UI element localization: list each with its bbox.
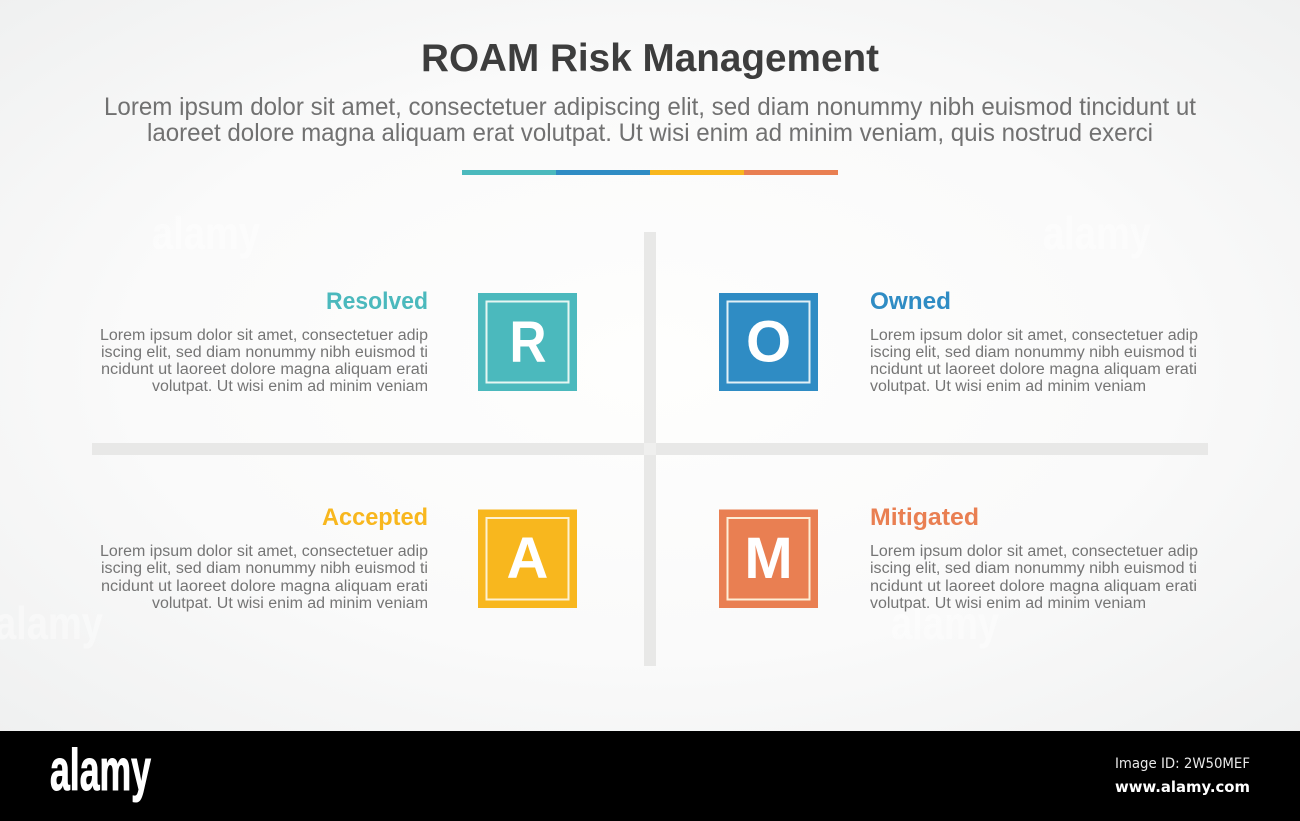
text block: accepted: Lorem ipsum dolor sit amet, consectetuer adip (100, 543, 428, 560)
text block: resolved: iscing elit, sed diam nonummy nibh euismod ti (101, 344, 428, 361)
text block: resolved: Lorem ipsum dolor sit amet, consectetuer adip (100, 327, 428, 344)
text block: accepted (100, 543, 428, 612)
text block: owned: Lorem ipsum dolor sit amet, consectetuer adip (870, 327, 1198, 344)
watermarks: alamy (891, 597, 999, 649)
footer logo: alamy (50, 738, 151, 803)
text block: owned: iscing elit, sed diam nonummy nibh euismod ti (870, 344, 1197, 361)
icon: R square (478, 293, 577, 391)
text block: mitigated: Lorem ipsum dolor sit amet, consectetuer adip (870, 543, 1198, 560)
icon: A square: A (507, 526, 548, 591)
icon: R square: R (510, 310, 546, 375)
text block: owned: volutpat. Ut wisi enim ad minim veniam (870, 378, 1146, 395)
quadrant axes (92, 232, 1208, 666)
icon: M square: M (744, 526, 793, 591)
text block: mitigated: volutpat. Ut wisi enim ad minim veniam (870, 595, 1146, 612)
icon: A square (478, 510, 577, 608)
watermarks: alamy (152, 207, 260, 259)
subtitle (104, 93, 1196, 147)
text block: resolved (100, 327, 428, 395)
text block: mitigated (870, 543, 1198, 612)
footer bar (0, 731, 1300, 821)
icon: M square (719, 510, 818, 608)
heading: owned: Owned (870, 288, 951, 315)
panel: resolved (100, 288, 577, 395)
heading: mitigated: Mitigated (870, 504, 979, 531)
subtitle: laoreet dolore magna aliquam erat volutpat. Ut wisi enim ad minim veniam, quis nostrud exerci (147, 119, 1153, 147)
text block: owned: ncidunt ut laoreet dolore magna aliquam erati (870, 361, 1197, 378)
heading: resolved: Resolved (326, 288, 428, 315)
title: ROAM Risk Management (421, 37, 879, 80)
panel: accepted (100, 504, 577, 612)
subtitle: Lorem ipsum dolor sit amet, consectetuer adipiscing elit, sed diam nonummy nibh euismod tincidunt ut (104, 93, 1196, 121)
text block: mitigated: iscing elit, sed diam nonummy nibh euismod ti (870, 560, 1197, 577)
text block: resolved: volutpat. Ut wisi enim ad minim veniam (152, 378, 428, 395)
panel: owned (719, 288, 1198, 395)
image id: Image ID: 2W50MEF (1115, 756, 1250, 772)
website: www.alamy.com (1115, 778, 1250, 796)
text block: mitigated: ncidunt ut laoreet dolore magna aliquam erati (870, 578, 1197, 595)
colour divider (462, 170, 838, 175)
icon: O square: O (746, 310, 791, 374)
watermarks (0, 207, 1151, 649)
panel: mitigated (719, 504, 1198, 612)
text block: accepted: ncidunt ut laoreet dolore magna aliquam erati (101, 578, 428, 595)
text block: resolved: ncidunt ut laoreet dolore magna aliquam erati (101, 361, 428, 378)
heading: accepted: Accepted (322, 504, 428, 531)
text block: accepted: iscing elit, sed diam nonummy nibh euismod ti (101, 560, 428, 577)
text block: owned (870, 327, 1198, 395)
text block: accepted: volutpat. Ut wisi enim ad minim veniam (152, 595, 428, 612)
watermarks: alamy (1043, 207, 1151, 259)
icon: O square (719, 293, 818, 391)
